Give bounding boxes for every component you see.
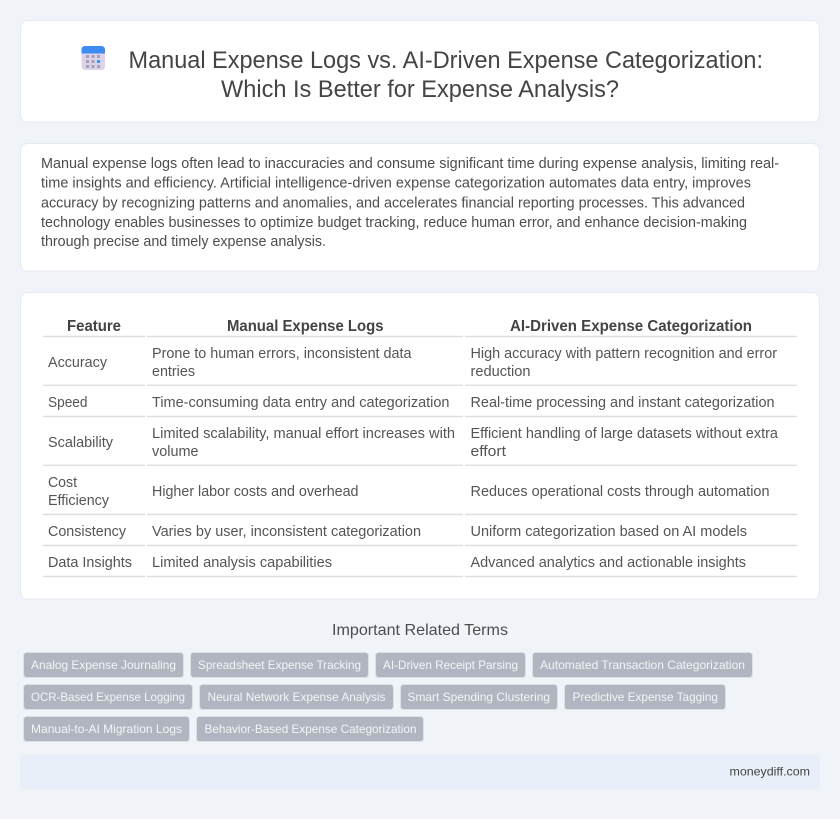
- text block: introduction paragraph: accuracy by recognizing patterns and anomalies, and accelerates financial reporting processes. This advanced: [41, 196, 745, 212]
- related term tags: Automated Transaction Categorization: [540, 658, 745, 672]
- table row: consistency: Varies by user, inconsistent categorization: [152, 524, 421, 540]
- related term tags: Smart Spending Clustering: [408, 690, 550, 704]
- panel: title card: [20, 20, 820, 122]
- table row: accuracy: Accuracy: [48, 355, 108, 371]
- table row: cost efficiency: Cost: [48, 475, 77, 491]
- table row: speed: [48, 395, 774, 411]
- related term tags: Neural Network Expense Analysis: [208, 690, 386, 704]
- table row: consistency: [48, 524, 747, 540]
- table row: speed: Speed: [48, 395, 88, 411]
- text block: introduction paragraph: technology enables businesses to optimize budget tracking, reduce human error, and enhance decision-making: [41, 215, 747, 231]
- text block: introduction paragraph: Manual expense logs often lead to inaccuracies and consume significant time during expense analysis, limiting real-: [41, 156, 779, 172]
- table row: cost efficiency: Reduces operational costs through automation: [470, 484, 770, 500]
- related term tags: AI-Driven Receipt Parsing: [383, 658, 518, 672]
- title: Manual Expense Logs vs. AI-Driven Expense Categorization:: [128, 47, 763, 74]
- footer: moneydiff.com: [730, 765, 810, 779]
- table row: scalability: effort: [470, 444, 506, 460]
- table header row: Feature: [67, 318, 121, 335]
- table row: data insights: [48, 555, 746, 571]
- table row: accuracy: [48, 346, 777, 380]
- heading: important related terms: Important Related Terms: [332, 622, 508, 639]
- related term tags: OCR-Based Expense Logging: [31, 690, 185, 704]
- table row: cost efficiency: Efficiency: [48, 493, 110, 509]
- table row: consistency: Consistency: [48, 524, 127, 540]
- table row: data insights: Advanced analytics and actionable insights: [470, 555, 746, 571]
- title: Which Is Better for Expense Analysis?: [221, 76, 619, 103]
- table row: scalability: Scalability: [48, 435, 114, 451]
- panel: introduction: [20, 144, 820, 271]
- text block: introduction paragraph: [41, 156, 779, 250]
- icon: calendar: [82, 46, 105, 70]
- table row: scalability: [48, 426, 778, 460]
- table row: data insights: Limited analysis capabilities: [152, 555, 332, 571]
- table row: data insights: Data Insights: [48, 555, 132, 571]
- table header row: Manual Expense Logs: [227, 318, 384, 335]
- related term tags: Spreadsheet Expense Tracking: [198, 658, 361, 672]
- table row: cost efficiency: [48, 475, 770, 509]
- panel: comparison table: [20, 292, 820, 599]
- table header row: AI-Driven Expense Categorization: [510, 318, 752, 335]
- table header row: [67, 318, 752, 335]
- text block: introduction paragraph: through precise and timely expense analysis.: [41, 234, 326, 250]
- related term tags: [24, 652, 752, 742]
- related term tags: Analog Expense Journaling: [31, 658, 176, 672]
- table row: scalability: volume: [152, 444, 198, 460]
- table row: consistency: Uniform categorization based on AI models: [470, 524, 747, 540]
- title: [128, 47, 763, 103]
- table row: accuracy: entries: [152, 364, 195, 380]
- table row: speed: Time-consuming data entry and categorization: [152, 395, 450, 411]
- table row: scalability: Limited scalability, manual effort increases with: [152, 426, 455, 442]
- table row: scalability: Efficient handling of large datasets without extra: [470, 426, 778, 442]
- table row: accuracy: High accuracy with pattern recognition and error: [470, 346, 777, 362]
- related term tags: Predictive Expense Tagging: [572, 690, 718, 704]
- table row: speed: Real-time processing and instant categorization: [470, 395, 774, 411]
- text block: introduction paragraph: time insights and efficiency. Artificial intelligence-driven expense categorization automates data entry, improves: [41, 176, 751, 192]
- related term tags: Behavior-Based Expense Categorization: [204, 722, 416, 736]
- footer: [20, 755, 820, 789]
- table row: accuracy: Prone to human errors, inconsistent data: [152, 346, 412, 362]
- related term tags: Manual-to-AI Migration Logs: [31, 722, 182, 736]
- table row: cost efficiency: Higher labor costs and overhead: [152, 484, 358, 500]
- table row: accuracy: reduction: [470, 364, 530, 380]
